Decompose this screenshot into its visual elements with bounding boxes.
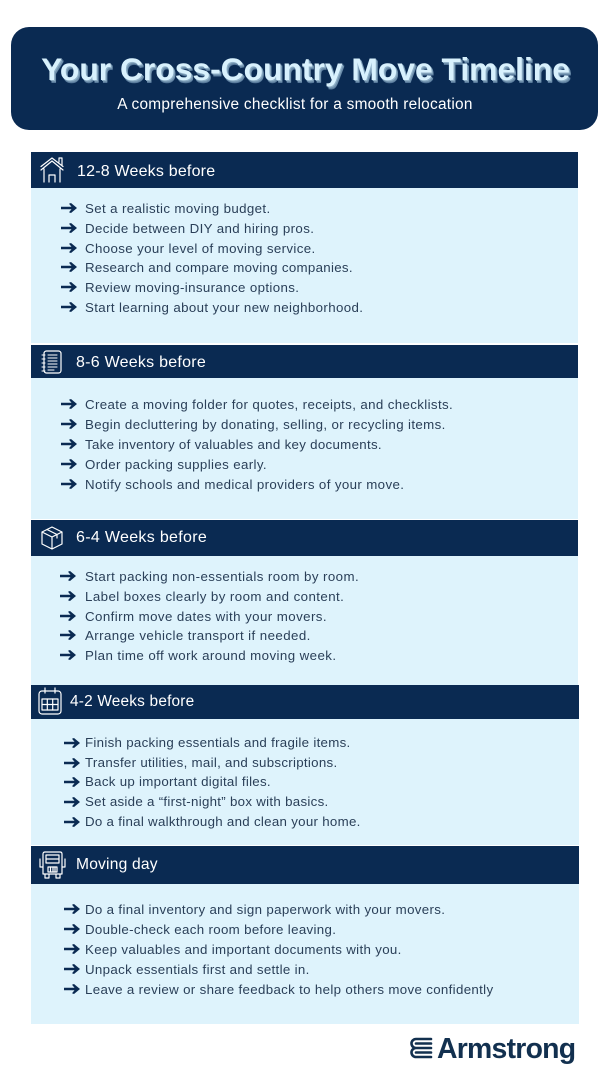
title banner bbox=[11, 27, 598, 130]
panel: 12-8 weeks before bbox=[31, 152, 578, 343]
icon: logo mark bbox=[410, 1038, 432, 1058]
item: Set a realistic moving budget. bbox=[85, 201, 271, 216]
item: Do a final inventory and sign paperwork with your movers. bbox=[85, 902, 445, 917]
item: Research and compare moving companies. bbox=[85, 260, 353, 275]
item: Create a moving folder for quotes, receipts, and checklists. bbox=[85, 397, 453, 412]
item: Start packing non-essentials room by room. bbox=[85, 569, 359, 584]
item: Finish packing essentials and fragile items. bbox=[85, 735, 351, 750]
item: Begin decluttering by donating, selling, or recycling items. bbox=[85, 417, 446, 432]
item: Keep valuables and important documents with you. bbox=[85, 942, 402, 957]
subtitle: A comprehensive checklist for a smooth relocation bbox=[117, 96, 473, 113]
item: Confirm move dates with your movers. bbox=[85, 609, 327, 624]
section heading: 6-4 Weeks before bbox=[76, 529, 207, 546]
section heading: 4-2 Weeks before bbox=[70, 693, 194, 710]
panel: 6-4 weeks before bbox=[31, 520, 578, 685]
section header band bbox=[31, 520, 578, 556]
icon: calendar bbox=[38, 687, 62, 715]
section header band bbox=[31, 152, 578, 188]
item: Start learning about your new neighborhood. bbox=[85, 300, 363, 315]
checklist bbox=[61, 397, 453, 492]
item: Order packing supplies early. bbox=[85, 457, 267, 472]
item: Set aside a “first-night” box with basics. bbox=[85, 794, 328, 809]
icon: house bbox=[40, 157, 64, 183]
section header band bbox=[31, 685, 579, 719]
checklist bbox=[60, 569, 359, 663]
item: Do a final walkthrough and clean your home. bbox=[85, 814, 361, 829]
item: Unpack essentials first and settle in. bbox=[85, 962, 310, 977]
item: Decide between DIY and hiring pros. bbox=[85, 221, 314, 236]
section heading: Moving day bbox=[76, 856, 158, 873]
item: Review moving-insurance options. bbox=[85, 280, 299, 295]
item: Take inventory of valuables and key documents. bbox=[85, 437, 382, 452]
item: Choose your level of moving service. bbox=[85, 241, 316, 256]
checklist bbox=[64, 902, 494, 997]
section header band bbox=[31, 846, 579, 884]
section heading: 8-6 Weeks before bbox=[76, 354, 206, 371]
item: Leave a review or share feedback to help others move confidently bbox=[85, 982, 493, 997]
item: Arrange vehicle transport if needed. bbox=[85, 628, 311, 643]
item: Notify schools and medical providers of your move. bbox=[85, 477, 404, 492]
panel: moving day bbox=[31, 846, 579, 1024]
title: Your Cross-Country Move Timeline bbox=[41, 51, 570, 87]
icon: truck bbox=[39, 851, 66, 879]
panel: 8-6 weeks before bbox=[31, 345, 578, 519]
item: Double-check each room before leaving. bbox=[85, 922, 336, 937]
item: Label boxes clearly by room and content. bbox=[85, 589, 344, 604]
icon: box bbox=[41, 526, 63, 550]
item: Transfer utilities, mail, and subscriptions. bbox=[85, 755, 337, 770]
panel: 4-2 weeks before bbox=[31, 685, 579, 845]
item: Back up important digital files. bbox=[85, 774, 271, 789]
item: Plan time off work around moving week. bbox=[85, 648, 336, 663]
icon: notebook bbox=[42, 350, 62, 374]
checklist bbox=[64, 735, 361, 829]
logo: Armstrong bbox=[410, 1033, 575, 1065]
section heading: 12-8 Weeks before bbox=[77, 163, 215, 180]
wordmark: Armstrong bbox=[437, 1033, 575, 1065]
checklist bbox=[61, 201, 363, 315]
section header band bbox=[31, 345, 578, 378]
